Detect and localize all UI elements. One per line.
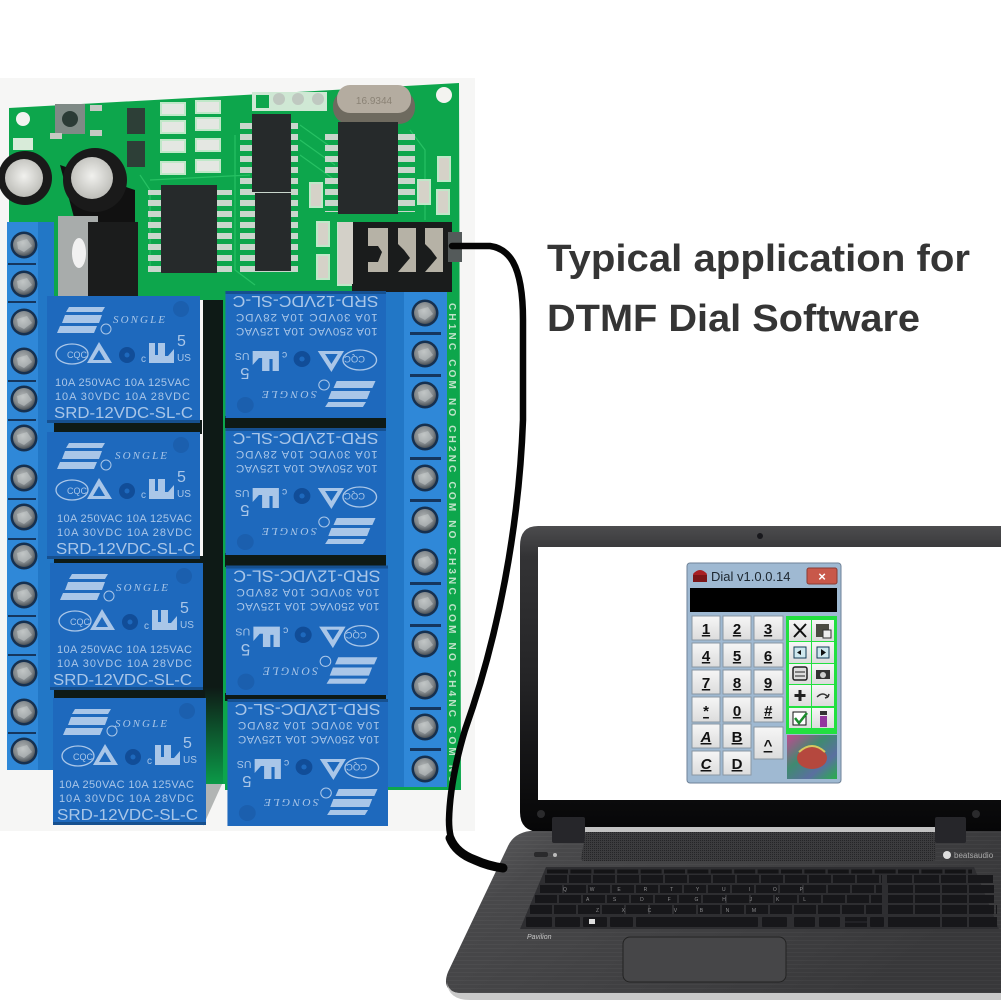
keypad: 4: [702, 648, 711, 665]
relay 7 (rotated): US: [235, 626, 250, 637]
relay 8 (rotated): c: [284, 757, 289, 768]
function row: [547, 870, 972, 874]
relay 8 (rotated): CQC: [346, 762, 367, 772]
numeric keypad: [887, 879, 997, 922]
mounting holes: [16, 87, 452, 126]
relay 7 (rotated): c: [283, 625, 288, 636]
relay 5 (rotated): 10A 250VAC 10A 125VAC: [236, 325, 378, 337]
relay 5 (rotated): [225, 291, 386, 418]
front silver edge: [447, 982, 1001, 1000]
relay 5 (rotated): US: [235, 350, 250, 361]
relay 1: CQC: [67, 350, 88, 360]
IC chips: [148, 114, 415, 273]
relay 6 (rotated): c: [282, 486, 287, 497]
green tool panel: [786, 616, 837, 734]
relay 2: 10A 30VDC 10A 28VDC: [57, 527, 192, 539]
relay 3: 5: [180, 600, 189, 617]
relay 2: c: [141, 490, 146, 501]
relay 1: SRD-12VDC-SL-C: [54, 405, 193, 422]
laptop base: [446, 831, 1001, 993]
keypad: [692, 616, 783, 775]
icon: flask: [820, 711, 827, 727]
relay 2: [47, 432, 200, 559]
relay 4: SONGLE: [115, 718, 167, 730]
relay 5 (rotated): SONGLE: [262, 388, 317, 400]
keypad: 5: [733, 648, 741, 665]
webcam: [757, 533, 763, 539]
relay 6 (rotated): 10A 250VAC 10A 125VAC: [236, 462, 378, 474]
icon: rewind: [794, 647, 806, 658]
key legends: [563, 887, 806, 914]
relay 6 (rotated): 10A 30VDC 10A 28VDC: [236, 448, 378, 460]
relay 6 (rotated): 5: [240, 501, 250, 519]
relay 4: SRD-12VDC-SL-C: [57, 807, 198, 824]
relay 3: [50, 563, 203, 690]
relay module board: [0, 83, 462, 826]
relay 7 (rotated): 10A 250VAC 10A 125VAC: [236, 600, 380, 612]
icon: plus: [794, 690, 806, 701]
key legends: Q W E R T Y U I O P: [563, 887, 804, 893]
relay 1: 10A 250VAC 10A 125VAC: [55, 377, 190, 389]
phone icon: [693, 570, 707, 582]
audio jack: [338, 222, 462, 292]
speaker grille: [581, 832, 936, 861]
relay 4: 10A 30VDC 10A 28VDC: [59, 793, 194, 805]
icon: check box: [793, 712, 807, 725]
relay 8 (rotated): US: [237, 758, 252, 769]
keypad: 7: [702, 675, 710, 692]
relay 7 (rotated): 5: [241, 640, 250, 659]
relay 5 (rotated): SRD-12VDC-SL-C: [233, 292, 379, 310]
relay 1: 5: [177, 333, 186, 350]
keypad: 2: [733, 621, 741, 638]
relay 1: c: [141, 354, 146, 365]
windows key mark: [589, 919, 595, 924]
screen: [538, 547, 1001, 800]
laptop lid: [520, 526, 1001, 832]
relay 5 (rotated): 10A 30VDC 10A 28VDC: [236, 311, 378, 323]
resistor arrays: [127, 108, 145, 167]
key legends: A S D F G H J K L: [586, 897, 806, 903]
relay 8 (rotated): 5: [242, 772, 252, 790]
Pavilion label: Pavilion: [527, 934, 552, 941]
relay 8 (rotated): [227, 699, 388, 826]
relay 6 (rotated): SONGLE: [262, 525, 317, 537]
relay 8 (rotated): 10A 30VDC 10A 28VDC: [238, 719, 380, 731]
relay 2: 10A 250VAC 10A 125VAC: [57, 513, 192, 525]
key legends: Z X C V B N M: [596, 908, 756, 914]
bottom key row: [526, 917, 884, 927]
green PCB: [9, 83, 461, 790]
keypad: D: [732, 756, 743, 773]
relay 5 (rotated): 5: [240, 364, 250, 382]
hinges: [552, 817, 966, 843]
icon: clipboard: [816, 624, 831, 638]
relay 4: c: [147, 756, 152, 767]
relay 4: 10A 250VAC 10A 125VAC: [59, 779, 194, 791]
keyboard well: [520, 867, 999, 929]
window frame: [687, 563, 841, 783]
lid rubber feet: [537, 810, 980, 818]
relay 1: SONGLE: [113, 314, 165, 326]
keypad: 1: [702, 621, 710, 638]
keypad: 9: [764, 675, 772, 692]
touchpad: [623, 937, 786, 982]
right terminal block: [386, 292, 447, 787]
relay 3: c: [144, 621, 149, 632]
keypad: 6: [764, 648, 772, 665]
relay 2: 5: [177, 469, 186, 486]
relay 5 (rotated): c: [282, 349, 287, 360]
relay 8 (rotated): SONGLE: [264, 796, 319, 808]
relay 3: US: [180, 620, 194, 631]
status LEDs: [161, 101, 220, 174]
photo backdrop: [0, 78, 475, 831]
relay 1: [47, 296, 200, 423]
board traces: [140, 125, 425, 285]
keypad: *: [703, 703, 709, 720]
left terminal block: [7, 222, 54, 770]
close button: [807, 568, 837, 584]
relay 7 (rotated): CQC: [345, 630, 367, 640]
keypad: B: [732, 729, 743, 746]
relay 6 (rotated): US: [235, 487, 250, 498]
keypad: #: [764, 703, 773, 720]
logo image: [787, 735, 837, 779]
relay 3: SONGLE: [116, 582, 168, 594]
tactile push button: [50, 104, 102, 139]
display: [690, 588, 837, 612]
relay 7 (rotated): SRD-12VDC-SL-C: [233, 567, 381, 585]
icon: cross: [794, 624, 806, 637]
relay 3: 10A 250VAC 10A 125VAC: [57, 644, 192, 656]
relay 2: SRD-12VDC-SL-C: [56, 541, 195, 558]
relay 5 (rotated): CQC: [344, 354, 365, 364]
cable: [449, 246, 523, 868]
crystal oscillator: 16.9344: [356, 96, 393, 107]
relay 4: CQC: [73, 752, 94, 762]
icon: camera: [816, 670, 830, 679]
relay 4: 5: [183, 735, 192, 752]
relay 3: 10A 30VDC 10A 28VDC: [57, 658, 192, 670]
electrolytic capacitors: [0, 148, 135, 240]
hinge strip: [585, 827, 935, 832]
icon: printer: [793, 667, 807, 680]
close button: ×: [818, 569, 826, 584]
voltage regulator: [58, 216, 138, 298]
relay 7 (rotated): 10A 30VDC 10A 28VDC: [236, 586, 380, 598]
relay 1: 10A 30VDC 10A 28VDC: [55, 391, 190, 403]
board edge terminal labels: CH1NC COM NO CH2NC COM NO CH3NC COM NO CH4NC COM NO: [446, 303, 457, 783]
keypad: 3: [764, 621, 772, 638]
SMD parts: [310, 157, 450, 285]
relay 2: US: [177, 489, 191, 500]
relay 3: CQC: [70, 617, 90, 627]
relay 7 (rotated): [226, 565, 388, 695]
dark gap behind relays: [203, 300, 223, 784]
power button: [534, 852, 557, 857]
keypad: 0: [733, 703, 741, 720]
crystal oscillator: [333, 85, 415, 124]
keypad: ^: [764, 737, 773, 754]
relay 6 (rotated): [225, 428, 386, 555]
keypad: A: [700, 729, 711, 746]
relay 8 (rotated): 10A 250VAC 10A 125VAC: [238, 733, 380, 745]
relay 2: SONGLE: [115, 450, 167, 462]
relay 1: US: [177, 353, 191, 364]
keypad: 8: [733, 675, 741, 692]
main key rows: [530, 879, 882, 910]
keypad: C: [701, 756, 713, 773]
relay 6 (rotated): CQC: [344, 491, 365, 501]
header pads: [252, 92, 327, 111]
beats audio badge: beatsaudio: [954, 851, 994, 860]
window title: Dial v1.0.0.14: [711, 569, 790, 584]
relay 4: US: [183, 755, 197, 766]
heading: Typical application for: [547, 238, 970, 280]
relay 4: [53, 698, 206, 825]
laptop: [446, 526, 1001, 1000]
relay 3: SRD-12VDC-SL-C: [53, 672, 192, 689]
heading: DTMF Dial Software: [547, 298, 920, 340]
icon: play: [817, 647, 829, 658]
relay 2: CQC: [67, 486, 88, 496]
white pads near capacitor: [13, 138, 33, 150]
Dial software window: [687, 563, 841, 783]
relay 6 (rotated): SRD-12VDC-SL-C: [233, 429, 379, 447]
icon: redo arrow: [817, 694, 829, 698]
relay 7 (rotated): SONGLE: [263, 665, 318, 676]
relay 8 (rotated): SRD-12VDC-SL-C: [235, 700, 381, 718]
heading: [547, 238, 970, 340]
keyboard: [520, 867, 999, 929]
